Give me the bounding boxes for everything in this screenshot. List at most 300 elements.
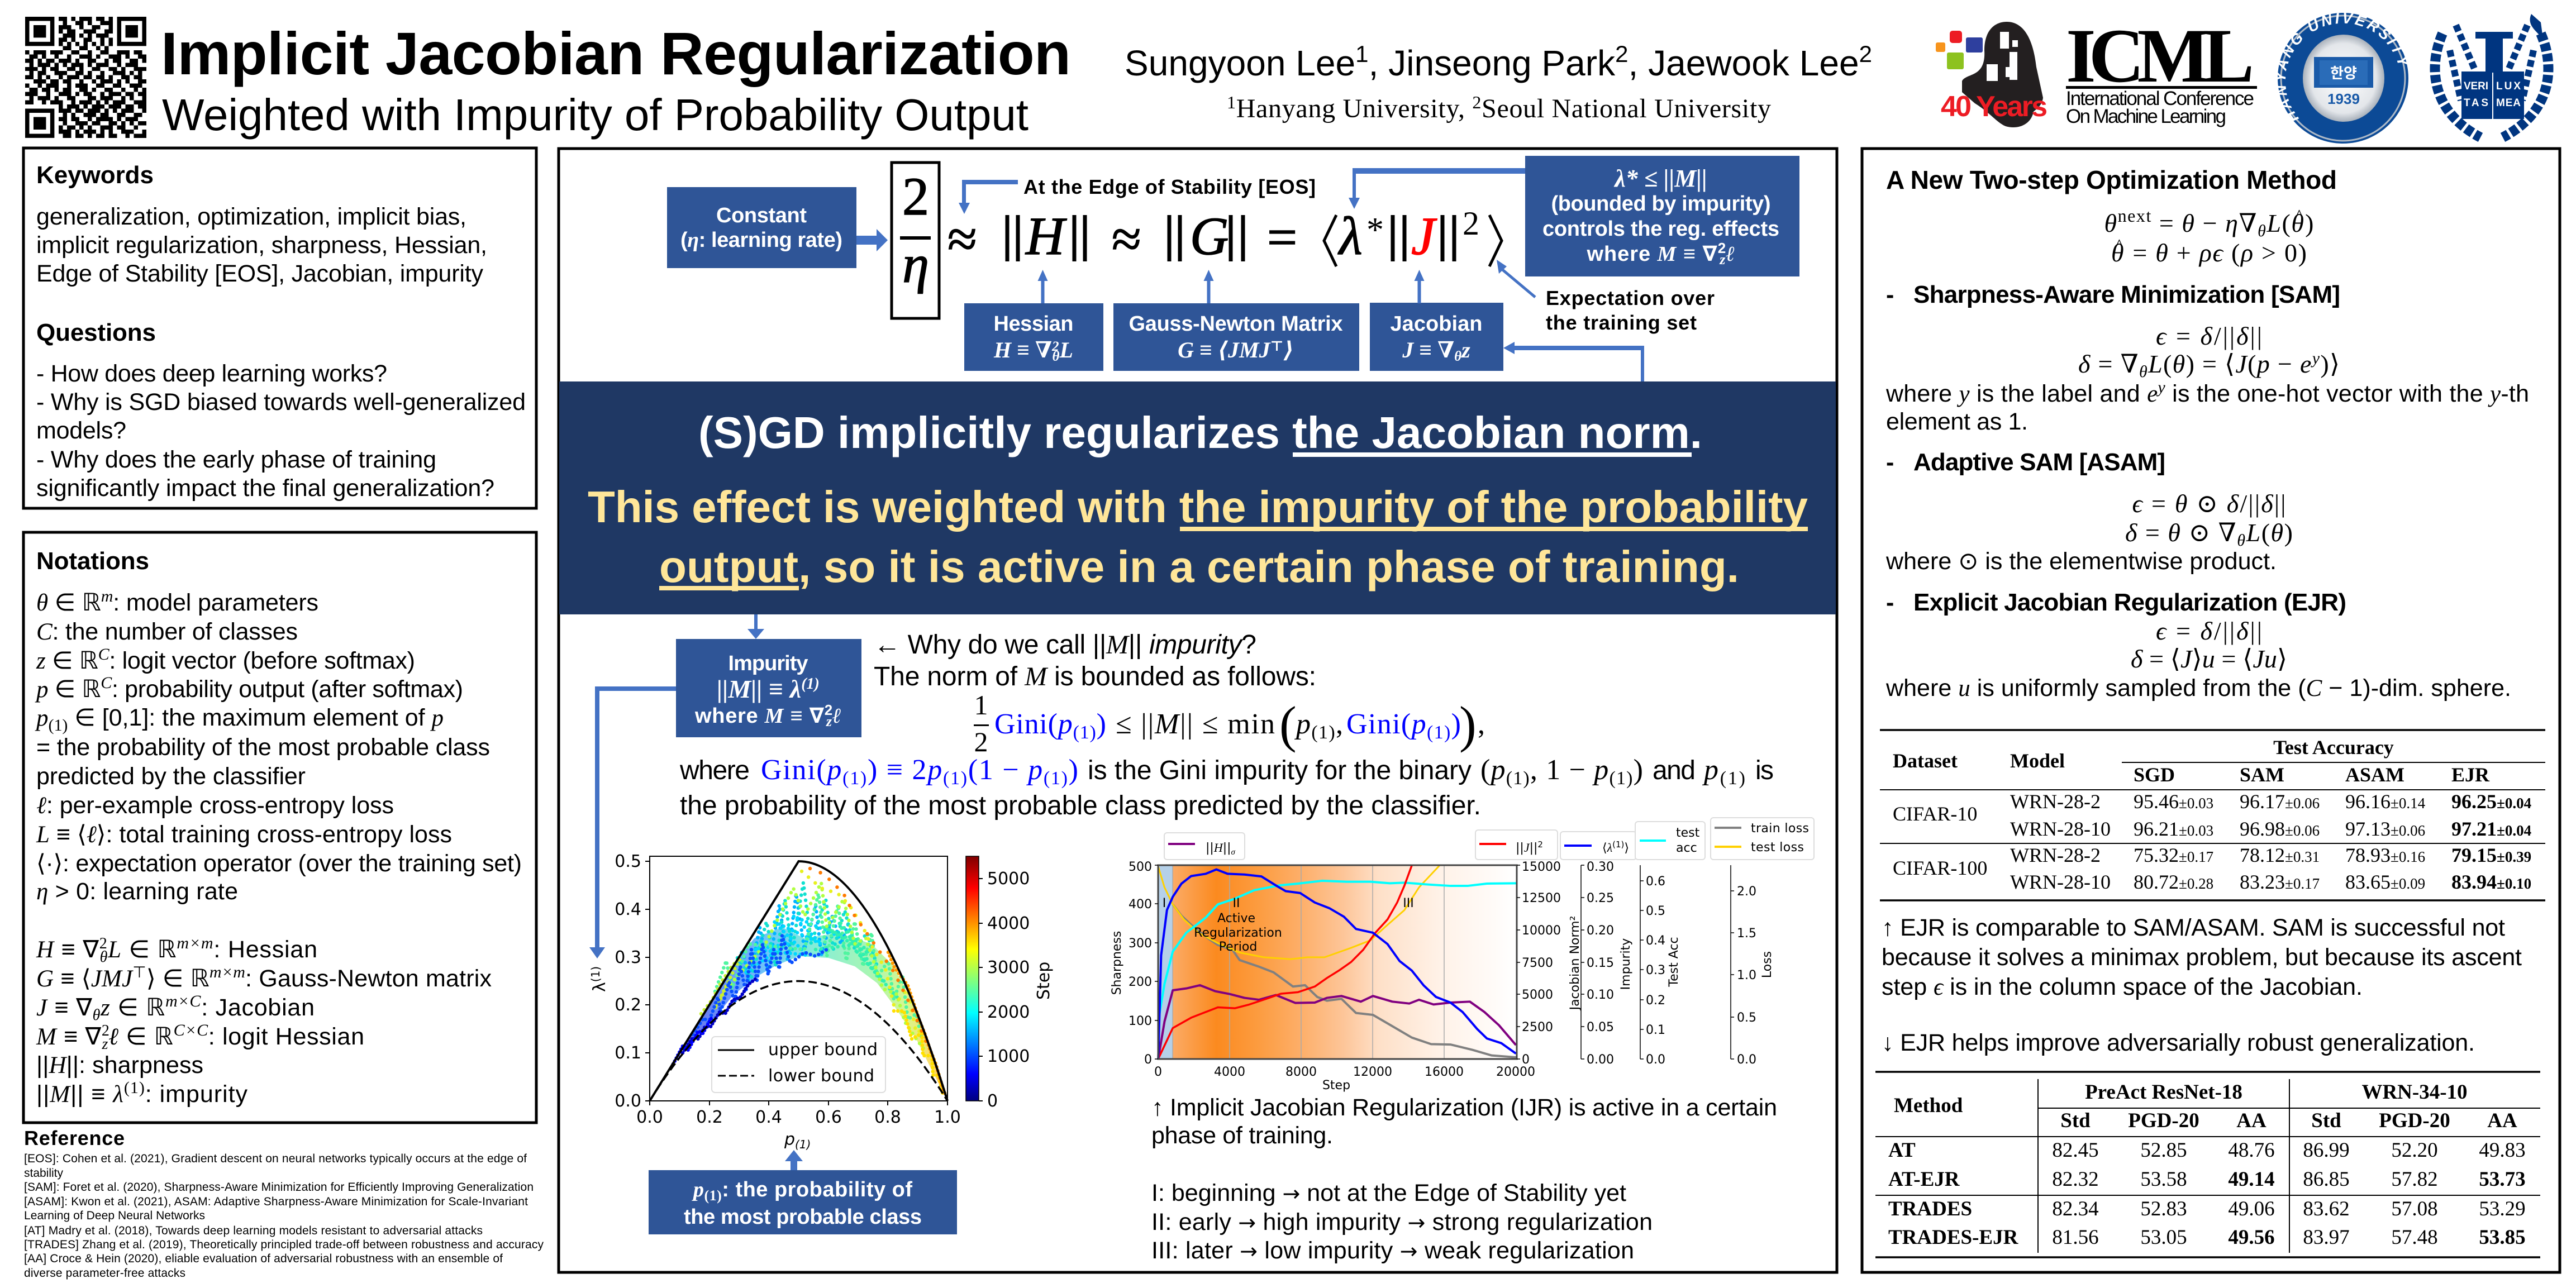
text: IJR explanation: II: early → high impurity → strong regularization: [1151, 1209, 1653, 1235]
text: gini definition: (1): [842, 768, 866, 789]
panel: main centre: [559, 149, 1837, 1272]
equation: two-step update: θ − η∇: [2182, 209, 2257, 237]
upper bound curve: [650, 861, 947, 1101]
table rows: 86.99: [2303, 1139, 2350, 1162]
colorbar: 2000: [987, 1003, 1030, 1022]
step axis: 16000: [1425, 1065, 1464, 1079]
text: gini definition: and: [1653, 756, 1696, 785]
table rows: 49.83: [2479, 1139, 2526, 1162]
test accuracy axis: Test Acc: [1667, 937, 1681, 988]
equation: sharpness relation: J: [1411, 206, 1437, 266]
table header: AA: [2236, 1109, 2267, 1132]
box: gauss-newton matrix: G ≡ ⟨JMJ: [1178, 337, 1270, 362]
table rows: 96.98±0.06: [2240, 818, 2320, 840]
x tick labels: [636, 1108, 961, 1127]
equation: two-step update: (θ: [2282, 209, 2304, 237]
text: notation definitions: : logit Hessian: [208, 1023, 364, 1050]
equation: two-step update: =: [2152, 209, 2181, 237]
legend: sharpness: σ: [1231, 848, 1236, 857]
table header: SAM: [2240, 764, 2284, 786]
text: gini definition: (1 −: [968, 754, 1027, 786]
annotations: [1163, 896, 1414, 954]
equation: two-step update: θ: [2258, 222, 2266, 240]
equation: two-step update: θ: [2111, 238, 2124, 267]
box: lambda star bounded by impurity: z: [1719, 251, 1726, 268]
text: notation definitions: p: [430, 705, 444, 731]
sharpness axis: 400: [1129, 898, 1152, 912]
test accuracy axis: 0.4: [1646, 934, 1665, 948]
text: SAM description: where y is the label and e: [1886, 380, 2158, 407]
text: notation definitions: H ≡ ∇: [36, 936, 99, 963]
heading: reference: Reference: [24, 1127, 125, 1149]
box: lambda star bounded by impurity: [1525, 156, 1799, 276]
legend: losses: [1711, 818, 1814, 860]
legend: jacobian norm: 2: [1537, 839, 1543, 850]
table rows: 96.17±0.06: [2240, 790, 2320, 813]
text: EJR comparison: ↑ EJR is comparable to SAM/ASAM. SAM is successful not: [1882, 914, 2505, 941]
text: notation definitions: z: [101, 1036, 108, 1053]
table rows: [1893, 790, 2531, 893]
table rows: 82.32: [2052, 1168, 2099, 1191]
table rows: CIFAR-100: [1893, 857, 1987, 879]
text: question list: [36, 360, 526, 502]
text: SAM description: y-th: [2490, 380, 2529, 407]
box: hessian: 2: [1051, 339, 1059, 354]
text: notation definitions: (1): [124, 1079, 145, 1097]
text: keyword list: [36, 203, 487, 287]
equation: gini bounds: p: [1294, 708, 1311, 740]
text: reference list: [EOS]: Cohen et al. (2021), Gradient descent on neural networks typically occurs at the edge of: [24, 1152, 527, 1165]
box: constant learning rate: Constant: [716, 204, 807, 227]
text: gini definition: where: [679, 756, 750, 785]
text: notation definitions: θ ∈ ℝ: [36, 589, 101, 616]
table rows: 79.15±0.39: [2451, 844, 2531, 866]
lower bound curve: [650, 981, 947, 1101]
box: hessian: H ≡ ∇: [994, 337, 1052, 362]
legend: jacobian norm: ||J||: [1516, 841, 1537, 855]
text: notation definitions: ||M|| ≡ λ: [36, 1081, 123, 1108]
table rows: 53.05: [2140, 1226, 2187, 1249]
table rows: 53.58: [2140, 1168, 2187, 1191]
box: impurity: ||M|| ≡ λ: [717, 675, 801, 703]
authors: , Jaewook Lee: [1629, 43, 1859, 83]
affiliations: Seoul National University: [1482, 94, 1771, 123]
equation: two-step update: ^: [2296, 206, 2303, 225]
impurity axis: 0.10: [1587, 988, 1614, 1002]
test accuracy axis: 0.6: [1646, 875, 1665, 889]
heading: new two-step optimization method: A New Two-step Optimization Method: [1886, 165, 2337, 194]
equation: two-step update: θ + ρϵ (ρ > 0): [2155, 238, 2307, 267]
table rows: 49.56: [2228, 1226, 2275, 1249]
annotations: Period: [1219, 940, 1257, 954]
table header: [1894, 1081, 2517, 1132]
table header: PreAct ResNet-18: [2085, 1081, 2242, 1104]
text: notation definitions: p ∈ ℝ: [36, 676, 101, 703]
y axis label: (1): [589, 966, 602, 982]
table rows: 97.21±0.04: [2451, 818, 2531, 840]
impurity axis: 0.00: [1587, 1053, 1614, 1067]
text: notation definitions: θ: [93, 1006, 101, 1024]
box: impurity: [676, 639, 861, 737]
step axis: 12000: [1353, 1065, 1392, 1079]
label: expectation over the training set: [1546, 287, 1715, 334]
jacobian norm axis: [1517, 860, 1582, 1067]
box: probability of most probable class: (1): [704, 1187, 722, 1204]
annotations: Regularization: [1194, 926, 1282, 940]
table rows: AT-EJR: [1888, 1168, 1960, 1191]
text: reference list: [TRADES] Zhang et al. (2019), Theoretically principled trade-off between robustness and accuracy: [24, 1238, 544, 1251]
sharpness axis: Sharpness: [1110, 931, 1124, 995]
text: reference list: [24, 1152, 544, 1280]
box: impurity: z: [826, 713, 832, 729]
equation: SAM: y: [2311, 349, 2320, 368]
x axis label: p: [784, 1130, 795, 1149]
text: notation definitions: ||H||: sharpness: [36, 1052, 203, 1079]
arrow: constant to fraction: [856, 229, 888, 251]
box: constant learning rate: (η: learning rate): [680, 228, 842, 252]
text: gini definition: ): [1069, 754, 1078, 786]
equation: gini bounds: (: [1279, 696, 1297, 753]
text: notation definitions: : model parameters: [113, 589, 318, 616]
x axis label: (1): [795, 1138, 811, 1151]
icon: QR code: [25, 17, 146, 138]
box: impurity: where M ≡ ∇: [695, 704, 824, 728]
equation: sharpness relation: λ: [1337, 206, 1363, 266]
equation: gini bounds: (1): [1073, 722, 1096, 743]
table header: SGD: [2134, 764, 2175, 786]
text: notation definitions: ⟨·⟩: expectation operator (over the training set): [36, 850, 522, 877]
impurity axis: 0.30: [1587, 860, 1614, 874]
text: notation definitions: ∈ ℝ: [126, 1023, 173, 1050]
text: notation definitions: ℓ: [108, 1024, 118, 1050]
table rows: 57.82: [2391, 1168, 2438, 1191]
equation: SAM: [2078, 322, 2340, 381]
legend: upper bound: [768, 1040, 878, 1060]
axes ticks: [645, 861, 947, 1105]
text: EJR comparison: ↓ EJR helps improve adversarially robust generalization.: [1882, 1029, 2475, 1056]
text: ASAM description: where ⊙ is the elementwise product.: [1885, 548, 2277, 575]
sharpness axis: [1110, 860, 1158, 1067]
equation: gini bounds: ): [1097, 708, 1106, 740]
colorbar: 1000: [987, 1047, 1030, 1066]
box: jacobian: θ: [1454, 349, 1461, 364]
text: reference list: diverse parameter-free attacks: [24, 1267, 185, 1280]
table header: [1893, 736, 2490, 786]
table rows: 57.48: [2391, 1226, 2438, 1249]
equation: gini bounds: ): [1459, 696, 1477, 753]
table rows: 83.62: [2303, 1198, 2350, 1220]
loss axis: Loss: [1760, 951, 1774, 978]
text: reference list: [AA] Croce & Hein (2020), eliable evaluation of adversarial robustness with an ensemble of: [24, 1252, 503, 1265]
table rows: 97.13±0.06: [2345, 818, 2425, 840]
text: gini definition: is the Gini impurity for the binary: [1088, 756, 1472, 785]
authors: 2: [1859, 41, 1872, 67]
text: gini definition: p: [1592, 754, 1608, 786]
annotations: I: [1163, 896, 1166, 910]
equation: ASAM: ϵ = θ ⊙ δ/||δ||: [2132, 489, 2286, 518]
table header: Std: [2060, 1109, 2091, 1132]
equation: ASAM: L: [2246, 518, 2260, 547]
annotations: III: [1403, 896, 1414, 910]
box: impurity: Impurity: [728, 652, 808, 675]
table rows: 75.32±0.17: [2134, 844, 2213, 866]
box: impurity: ℓ: [832, 704, 841, 728]
table header: PGD-20: [2128, 1109, 2199, 1132]
text: notation definitions: ∈ ℝ: [117, 994, 165, 1021]
test accuracy axis: 0.5: [1646, 904, 1665, 918]
equation: sharpness relation: =: [1267, 207, 1297, 267]
section: references: [24, 1127, 544, 1280]
text: reference list: [AT] Madry et al. (2018), Towards deep learning models resistant to adversarial attacks: [24, 1224, 483, 1237]
table header: AA: [2487, 1109, 2517, 1132]
colorbar: 0: [987, 1091, 998, 1111]
icon: Seoul National University emblem: [2435, 14, 2548, 137]
text: why impurity: [874, 630, 1316, 691]
legend: lambda: ⟩: [1624, 841, 1629, 855]
jacobian norm axis: 7500: [1522, 956, 1553, 970]
equation: ASAM: θ: [2237, 531, 2245, 550]
legend: sharpness: [1164, 833, 1245, 860]
equation: two over eta in box: 2: [902, 166, 929, 226]
legend: lambda: [1560, 832, 1636, 860]
text: gini definition: [679, 754, 1774, 820]
text: question list: - Why does the early phase of training: [36, 446, 436, 473]
jacobian norm axis: 0: [1522, 1053, 1530, 1067]
impurity axis: 0.15: [1587, 956, 1614, 970]
annotations: II: [1233, 896, 1240, 910]
test accuracy axis: 0.2: [1646, 994, 1665, 1008]
text: keyword list: Edge of Stability [EOS], Jacobian, impurity: [36, 260, 484, 287]
jacobian norm axis: 10000: [1522, 924, 1561, 938]
jacobian norm axis: Jacobian Norm²: [1568, 916, 1582, 1011]
box: jacobian: z: [1460, 337, 1470, 362]
text: notation definitions: : Gauss-Newton matrix: [245, 965, 492, 992]
sharpness axis: 500: [1129, 860, 1152, 874]
table header: Method: [1894, 1094, 1963, 1117]
sharpness axis: 200: [1129, 975, 1152, 989]
text: EJR description: where u is uniformly sampled from the (C − 1)-dim. sphere.: [1885, 675, 2511, 702]
text: notation definitions: (1): [48, 716, 68, 734]
box: lambda star bounded by impurity: ℓ: [1726, 242, 1735, 266]
sharpness axis: 0: [1144, 1053, 1152, 1067]
arrow: probability box to x axis: [785, 1150, 803, 1170]
phase II and III background: [1173, 865, 1517, 1059]
equation: sharpness relation: ≈: [1112, 209, 1141, 269]
text: gini definition: the probability of the most probable class predicted by the classifier.: [680, 791, 1481, 820]
arrow: gauss-newton to equation: [1203, 270, 1213, 303]
table header: Dataset: [1893, 750, 1958, 772]
loss axis: 0.5: [1737, 1011, 1756, 1025]
equation: sharpness relation: *: [1366, 211, 1384, 249]
equation: two-step update: L: [2266, 209, 2281, 237]
box: jacobian: [1370, 303, 1503, 371]
table rows: 86.85: [2303, 1168, 2350, 1191]
legend: losses: train loss: [1751, 822, 1809, 836]
table header: WRN-34-10: [2361, 1081, 2468, 1104]
text: gini definition: (1): [1044, 768, 1068, 789]
box: lambda star bounded by impurity: where M ≡ ∇: [1587, 242, 1717, 266]
arrow: edge of stability to equation: [959, 180, 1018, 214]
headline: Jacobian norm: (S)GD implicitly regularizes the Jacobian norm.: [698, 408, 1702, 457]
equation: gini bounds: Gini(p: [994, 708, 1073, 740]
colorbar: 5000: [987, 869, 1030, 889]
text: notation definitions: : impurity: [145, 1081, 248, 1108]
arrow: banner to jacobian: [1503, 342, 1644, 381]
box: hessian: θ: [1053, 349, 1060, 364]
table rows: 82.45: [2052, 1139, 2099, 1162]
table rows: 96.21±0.03: [2134, 818, 2213, 840]
equation: two over eta in box: [892, 163, 939, 318]
text: notation definitions: : Jacobian: [201, 994, 315, 1021]
text: reference list: [ASAM]: Kwon et al. (2021), ASAM: Adaptive Sharpness-Aware Minimization for Scale-Invariant: [24, 1195, 528, 1208]
icon: ICML 40 years logo: 40 Years: [1941, 90, 2048, 123]
panel: notations: [23, 532, 536, 1123]
heading: questions: Questions: [36, 319, 156, 346]
colorbar: Step: [1034, 962, 1054, 1000]
text: notation definitions: ∈ ℝ: [129, 936, 177, 963]
equation: gini bounds: ≤ ||M|| ≤ min: [1116, 708, 1275, 740]
box: jacobian: J ≡ ∇: [1402, 337, 1454, 362]
box: hessian: L: [1059, 337, 1073, 362]
table rows: 78.93±0.16: [2345, 844, 2425, 866]
arrow: impurity box to scatter axis: [589, 686, 676, 958]
x tick labels: 0.0: [636, 1108, 663, 1127]
box: probability of most probable class: p: [692, 1178, 704, 1201]
legend: test accuracy: [1635, 822, 1705, 860]
text: notation definitions: m×C: [165, 992, 201, 1010]
icon: Seoul National University emblem: MEA: [2496, 97, 2521, 109]
authors: , Jinseong Park: [1369, 43, 1616, 83]
text: notation definitions: : probability output (after softmax): [112, 676, 463, 703]
chart: impurity scatter plot: [589, 852, 1054, 1151]
jacobian norm axis: 12500: [1522, 891, 1561, 905]
text: notation definitions: ∈ [0,1]: the maximum element of: [68, 704, 432, 731]
table rows: WRN-28-2: [2010, 790, 2101, 813]
equation: gini bounds: [974, 689, 1485, 757]
legend: lambda: (1): [1612, 839, 1624, 850]
text: IJR explanation: III: later → low impurity → weak regularization: [1151, 1237, 1634, 1264]
table rows: 80.72±0.28: [2134, 871, 2213, 893]
y tick labels: 0.5: [615, 852, 641, 871]
panel: keywords and questions: [23, 148, 536, 508]
table rows: 82.34: [2052, 1198, 2099, 1220]
box: probability of most probable class: [649, 1170, 957, 1234]
label: at the edge of stability: At the Edge of Stability [EOS]: [1023, 175, 1316, 198]
text: notation definitions: = the probability of the most probable class: [36, 734, 490, 761]
text: reference list: Learning of Deep Neural Networks: [24, 1209, 205, 1222]
icon: ICML wordmark: ICML: [2066, 13, 2254, 98]
sharpness axis: 100: [1129, 1014, 1152, 1028]
text: notation definitions: 2: [102, 1022, 109, 1039]
text: notation definitions: ⊤: [132, 963, 146, 981]
equation: EJR: δ = ⟨J⟩u = ⟨Ju⟩: [2131, 645, 2287, 673]
legend: sharpness: ||H||: [1206, 841, 1231, 855]
scatter points: [673, 869, 947, 1101]
equation: ASAM: [2125, 489, 2293, 550]
icon: ICML wordmark: On Machine Learning: [2066, 106, 2226, 127]
icon: ICML wordmark: International Conference: [2066, 88, 2254, 109]
panel: new optimization method: Adaptive SAM [ASAM]: [1913, 449, 2165, 476]
text: gini definition: is: [1755, 756, 1774, 785]
legend: [712, 1037, 885, 1093]
text: reference list: [SAM]: Foret et al. (2020), Sharpness-Aware Minimization for Efficiently Improving Generalization: [24, 1181, 534, 1194]
impurity axis: [1581, 860, 1633, 1067]
text: question list: models?: [36, 417, 126, 444]
text: question list: significantly impact the final generalization?: [36, 475, 494, 502]
arrow: jacobian to equation: [1415, 270, 1425, 303]
table rows: WRN-28-10: [2010, 818, 2111, 840]
text: EJR comparison: [1882, 914, 2522, 1056]
icon: Seoul National University emblem: TAS: [2464, 97, 2488, 109]
text: SAM description: [1885, 378, 2529, 435]
equation: sharpness relation: G: [1190, 206, 1229, 266]
annotations: Active: [1217, 912, 1255, 926]
box: hessian: Hessian: [993, 312, 1074, 336]
text: IJR explanation: [1151, 1094, 1777, 1264]
table rows: 49.06: [2228, 1198, 2275, 1220]
x tick labels: 0.2: [696, 1108, 723, 1127]
step axis: 20000: [1496, 1065, 1535, 1079]
equation: gini bounds: ): [1451, 708, 1461, 740]
box: probability of most probable class: : the probability of: [722, 1178, 912, 1201]
heading: EJR: -: [1886, 589, 1894, 616]
text: notation definitions: L: [107, 937, 121, 963]
table: test accuracy: [1880, 730, 2545, 900]
table: adversarial robustness: [1875, 1072, 2540, 1257]
banner: key message: [559, 381, 1836, 614]
table rows: 81.56: [2052, 1226, 2099, 1249]
text: question list: - Why is SGD biased towards well-generalized: [36, 389, 526, 416]
text: question list: - How does deep learning works?: [36, 360, 387, 387]
colorbar: [966, 856, 1054, 1111]
equation: two-step update: next: [2118, 206, 2151, 226]
table rows: [1888, 1139, 2526, 1249]
equation: gini bounds: (1): [1427, 722, 1450, 743]
table rows: 78.12±0.31: [2240, 844, 2320, 866]
legend: jacobian norm: [1475, 830, 1558, 860]
test accuracy axis: 0.3: [1646, 963, 1665, 977]
equation: SAM: θ: [2139, 362, 2148, 381]
box: gauss-newton matrix: ⊤: [1270, 339, 1284, 354]
text: notation definitions: G ≡ ⟨JMJ: [36, 965, 132, 992]
step axis: 8000: [1285, 1065, 1317, 1079]
table header: Std: [2311, 1109, 2341, 1132]
legend: losses: test loss: [1751, 841, 1804, 855]
equation: ASAM: δ = θ ⊙ ∇: [2125, 518, 2236, 547]
y axis label: λ: [590, 982, 610, 992]
text: gini definition: ): [1634, 754, 1643, 786]
panel: new optimization method: Sharpness-Aware Minimization [SAM]: [1913, 281, 2340, 308]
text: gini definition: p: [925, 754, 942, 786]
text: notation definitions: predicted by the classifier: [36, 763, 306, 790]
legend: lambda: ⟨λ: [1602, 841, 1612, 855]
affiliations: 2: [1472, 92, 1481, 112]
table header: Model: [2010, 750, 2065, 772]
text: notation definitions: M ≡ ∇: [36, 1023, 101, 1050]
impurity axis: Impurity: [1619, 938, 1633, 990]
table rows: 52.85: [2140, 1139, 2187, 1162]
equation: SAM: δ = ∇: [2078, 350, 2139, 378]
x tick labels: 1.0: [934, 1108, 961, 1127]
table rows: 57.08: [2391, 1198, 2438, 1220]
y tick labels: 0.0: [615, 1091, 641, 1111]
box: lambda star bounded by impurity: (bounded by impurity): [1551, 192, 1771, 216]
table header: ASAM: [2345, 764, 2404, 786]
text: gini definition: (1): [1720, 768, 1745, 789]
heading: SAM: -: [1886, 282, 1894, 308]
table header: PGD-20: [2379, 1109, 2450, 1132]
text: keyword list: implicit regularization, sharpness, Hessian,: [36, 232, 487, 259]
